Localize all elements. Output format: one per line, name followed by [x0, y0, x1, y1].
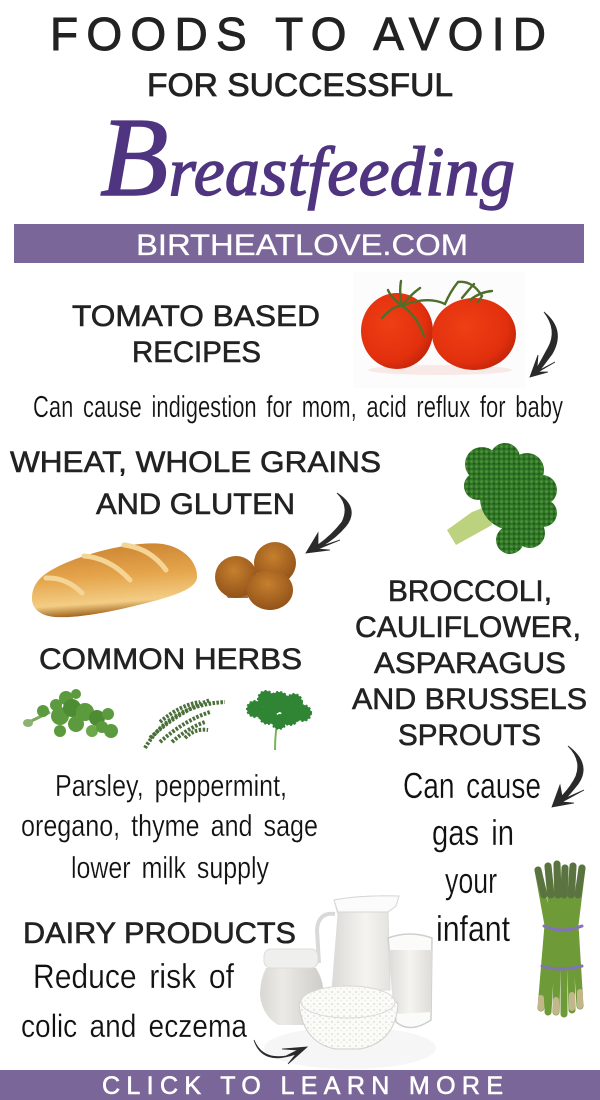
title: [50, 8, 546, 220]
section: broccoli: [352, 443, 587, 1014]
text: broccoli: gas in: [432, 812, 514, 853]
heading: tomato: TOMATO BASED: [72, 300, 320, 333]
heading: broccoli: CAULIFLOWER,: [355, 611, 581, 644]
heading: broccoli: BROCCOLI,: [388, 575, 552, 608]
milk glass: [388, 934, 432, 1028]
heading: broccoli: SPROUTS: [398, 719, 541, 752]
arrow: wheat: [306, 493, 351, 553]
title line 1: FOODS TO AVOID: [50, 8, 546, 60]
cottage cheese bowl: [299, 986, 398, 1049]
image: asparagus: [538, 864, 582, 1014]
website banner: BIRTHEATLOVE.COM: [136, 229, 468, 262]
title line 2: FOR SUCCESSFUL: [147, 67, 453, 103]
milk jug: [317, 896, 399, 990]
script title: Breastfeeding: [100, 96, 515, 220]
text: broccoli: Can cause: [403, 765, 541, 806]
text: herbs: oregano, thyme and sage: [21, 808, 318, 843]
heading: wheat: [10, 446, 381, 521]
image: bread: [32, 543, 197, 617]
image: broccoli: [447, 443, 557, 554]
section: tomato: [33, 272, 563, 424]
website banner: [14, 224, 584, 263]
text: broccoli: [403, 765, 541, 949]
call to action banner: CLICK TO LEARN MORE: [102, 1072, 503, 1100]
call to action banner: [0, 1070, 600, 1100]
text: broccoli: your: [445, 860, 497, 901]
arrow: broccoli: [552, 746, 584, 807]
image: dairy products: [260, 896, 436, 1069]
heading: wheat: AND GLUTEN: [96, 488, 295, 521]
jar: [260, 949, 323, 1025]
text: herbs: lower milk supply: [71, 850, 269, 885]
heading: broccoli: AND BRUSSELS: [352, 683, 587, 716]
text: dairy: Reduce risk of: [33, 958, 234, 996]
arrow: dairy: [254, 1040, 307, 1064]
heading: tomato: RECIPES: [132, 336, 261, 369]
section: herbs: [21, 643, 318, 885]
image: tomatoes: [353, 272, 525, 388]
text: herbs: Parsley, peppermint,: [55, 768, 287, 803]
heading: dairy: DAIRY PRODUCTS: [23, 917, 296, 950]
heading: broccoli: [352, 575, 587, 752]
image: thyme: [145, 700, 225, 748]
heading: wheat: WHEAT, WHOLE GRAINS: [10, 446, 381, 479]
section: dairy: [21, 896, 436, 1069]
image: parsley: [247, 691, 311, 750]
image: oregano: [23, 689, 118, 738]
heading: broccoli: ASPARAGUS: [374, 647, 566, 680]
text: dairy: [21, 958, 247, 1044]
heading: tomato: [72, 300, 320, 369]
arrow: tomato: [530, 312, 557, 377]
image: muffins: [215, 542, 296, 610]
section: wheat: [10, 446, 381, 617]
text: dairy: colic and eczema: [21, 1008, 247, 1044]
text: broccoli: infant: [436, 908, 510, 949]
heading: herbs: COMMON HERBS: [39, 643, 302, 676]
text: herbs: [21, 768, 318, 885]
